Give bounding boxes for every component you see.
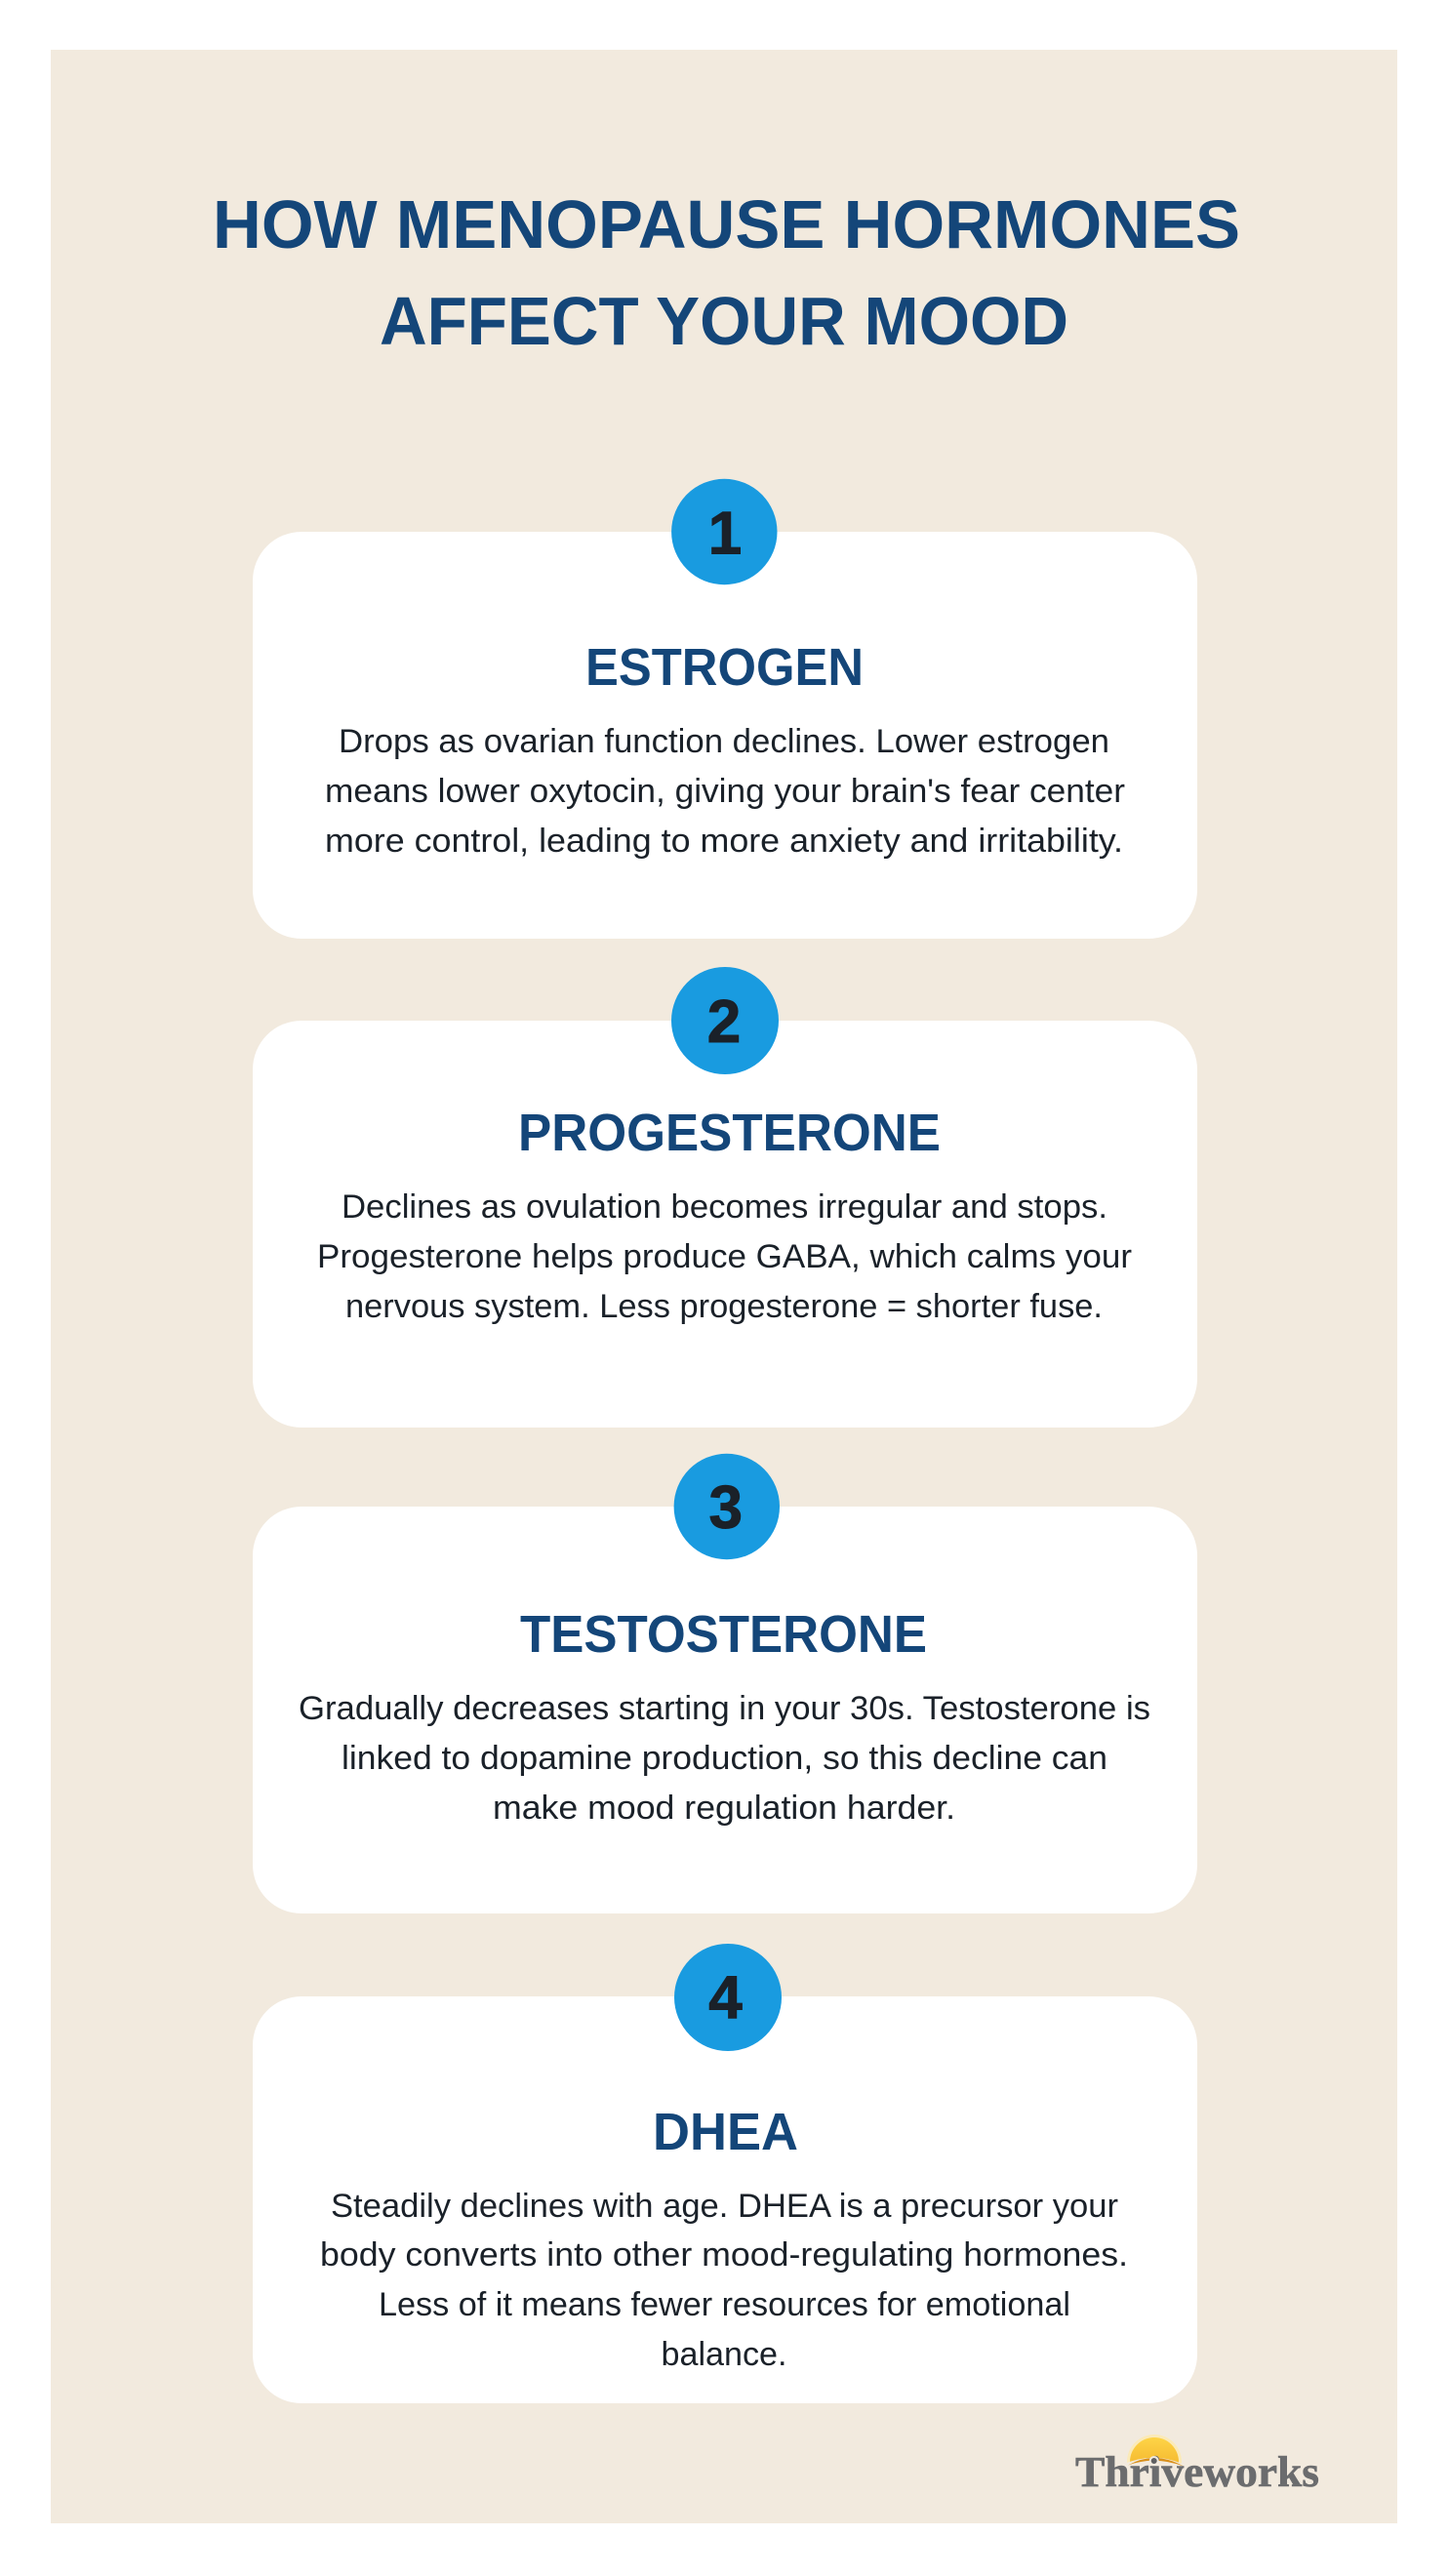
number badge 2 [671,967,779,1074]
card background [253,1996,1197,2403]
panel: testosterone card [253,1454,1197,1913]
body text [320,2188,1128,2373]
body text: make mood regulation harder. [493,1790,955,1827]
heading: progesterone: PROGESTERONE [518,1104,941,1162]
body text: Less of it means fewer resources for emotional [379,2286,1070,2323]
body text: Declines as ovulation becomes irregular and stops. [342,1188,1107,1226]
number badge 4 [674,1944,782,2051]
card background [253,1507,1197,1913]
number badge 3: 3 [708,1474,743,1542]
body text: body converts into other mood-regulating hormones. [320,2236,1128,2274]
body text: Steadily declines with age. DHEA is a precursor your [331,2188,1118,2225]
number badge 2: 2 [707,988,741,1056]
number badge 1 [671,479,777,584]
body text [325,723,1125,860]
card background [253,532,1197,939]
number badge 4: 4 [708,1964,743,2032]
body text: balance. [662,2336,786,2373]
wordmark: Thriveworks [1075,2448,1319,2496]
icon: rising sun [1122,2435,1187,2498]
body text: linked to dopamine production, so this decline can [342,1740,1107,1777]
body text: Gradually decreases starting in your 30s. Testosterone is [299,1690,1150,1727]
heading: testosterone: TESTOSTERONE [520,1605,927,1664]
title: HOW MENOPAUSE HORMONES [213,186,1240,262]
body text [299,1690,1150,1827]
body text: Progesterone helps produce GABA, which calms your [317,1238,1132,1275]
body text: more control, leading to more anxiety and irritability. [325,823,1123,860]
logo: thriveworks [1075,2435,1319,2498]
icon: i dot [1150,2457,1158,2465]
panel: progesterone card [253,967,1197,1428]
heading: dhea: DHEA [653,2103,798,2161]
card background [253,1021,1197,1428]
heading: estrogen: ESTROGEN [585,638,864,697]
body text: Drops as ovarian function declines. Lower estrogen [339,723,1109,760]
title: AFFECT YOUR MOOD [380,283,1068,359]
body text: nervous system. Less progesterone = shorter fuse. [345,1288,1103,1325]
body text [317,1188,1132,1325]
number badge 1: 1 [708,500,742,568]
title [213,186,1240,359]
number badge 3 [674,1454,780,1559]
panel: dhea card [253,1944,1197,2403]
panel: estrogen card [253,479,1197,939]
body text: means lower oxytocin, giving your brain's fear center [325,773,1125,810]
